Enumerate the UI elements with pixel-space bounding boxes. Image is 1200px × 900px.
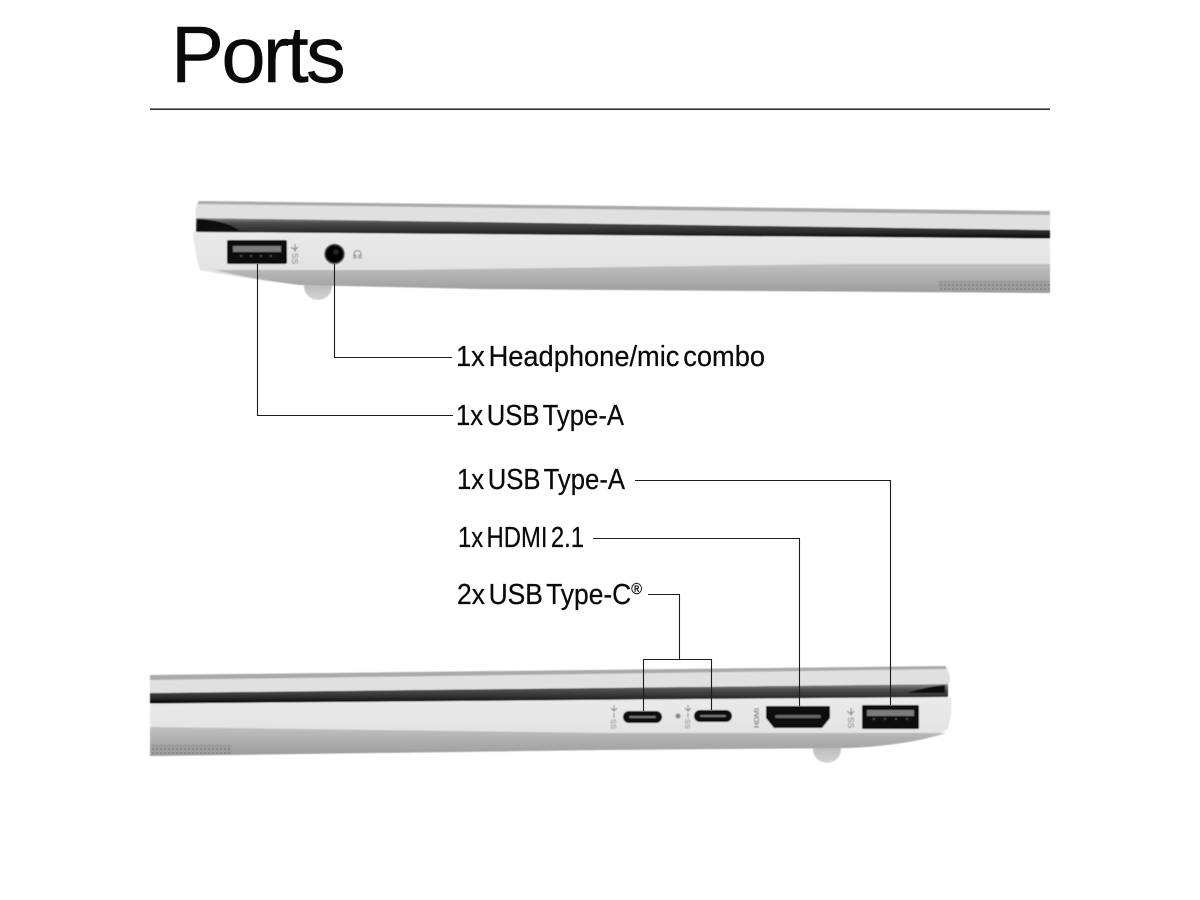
lid: [195, 201, 1050, 230]
leader lines: [258, 264, 890, 711]
USB-A port: [227, 240, 287, 264]
speaker grille: [938, 281, 1050, 292]
label: USB Type-C: ®: [631, 581, 642, 598]
label: USB Type-C: 2x USB Type-C: [457, 579, 648, 611]
USB-C label 1: SS: [609, 719, 618, 729]
label: USB Type-A left: 1x USB Type-A: [456, 400, 625, 432]
lid: [150, 666, 950, 693]
lid top edge: [197, 201, 1050, 215]
USB label: [846, 708, 856, 729]
foot: [304, 272, 332, 300]
USB-C label 1: [609, 705, 618, 729]
base: [193, 232, 1050, 293]
USB label: SS: [846, 717, 856, 729]
USB-C port 1: [623, 711, 662, 723]
title rule: [150, 108, 1050, 110]
hinge gap: [196, 218, 1050, 238]
base underside: [150, 727, 946, 756]
USB icon: SS: [290, 253, 300, 265]
headphone jack: [325, 244, 344, 264]
label: headphone: 1x Headphone/mic combo: [456, 341, 765, 373]
label: HDMI: 1x HDMI 2.1: [458, 522, 584, 554]
lid reflection: [197, 219, 240, 231]
USB icon: [290, 244, 300, 265]
lid reflection: [907, 685, 945, 693]
USB-C label 2: SS: [683, 719, 692, 729]
HDMI label: HDMI: [752, 708, 761, 728]
laptop top view: left side ports: [193, 201, 1050, 300]
USB-A port: [862, 705, 919, 729]
hinge gap: [150, 684, 948, 704]
USB-C port 2: [694, 710, 732, 722]
foot: [813, 735, 841, 763]
headphone icon: [354, 251, 361, 258]
USB-C label 2: [683, 705, 692, 729]
label: USB Type-A right: 1x USB Type-A: [457, 464, 626, 496]
status LED: [676, 714, 680, 718]
base underside: [215, 264, 1050, 293]
title: Ports: [171, 10, 343, 99]
laptop bottom view: right side ports: [150, 666, 952, 763]
speaker grille: [150, 745, 232, 755]
HDMI port: [766, 706, 830, 728]
base: [150, 697, 952, 756]
lid top edge: [150, 666, 947, 680]
